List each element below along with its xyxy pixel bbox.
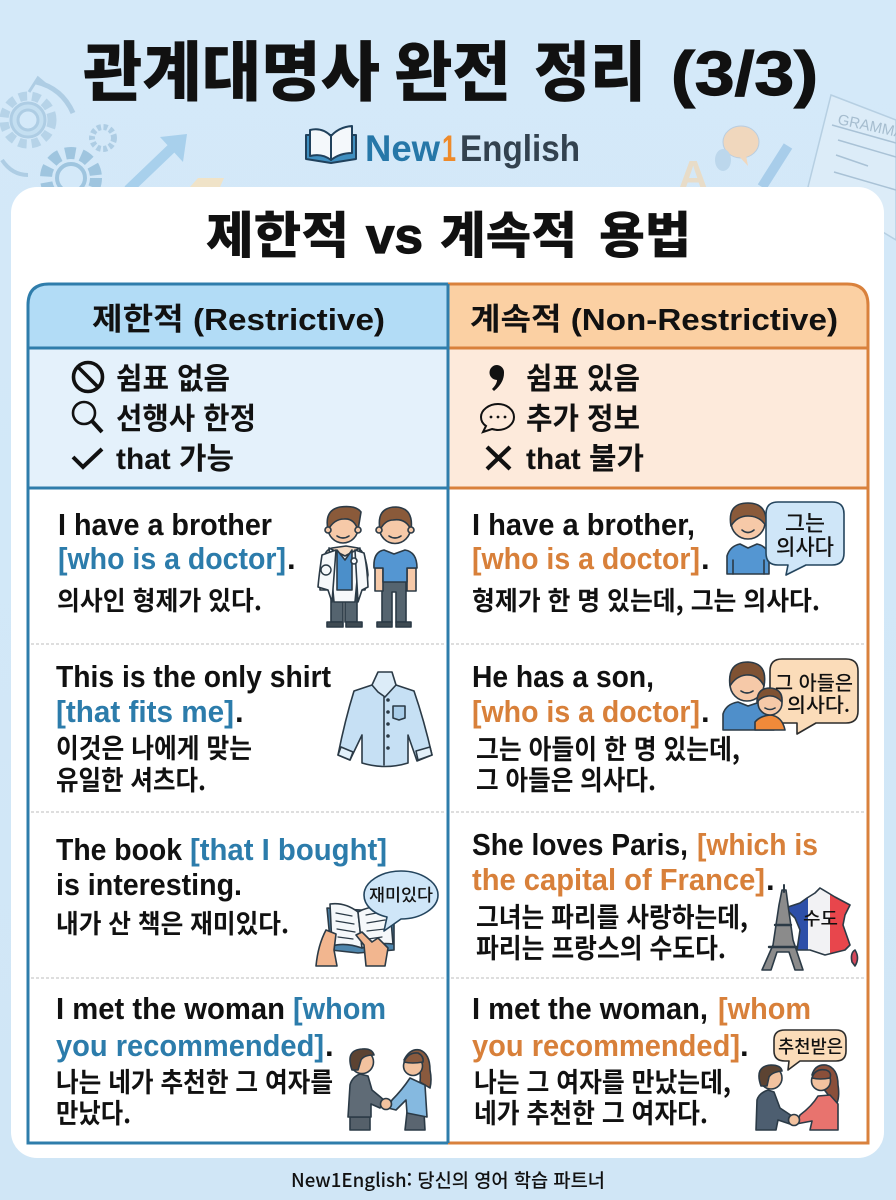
icon: magnifier	[73, 402, 102, 432]
non-restrictive example 4	[472, 991, 846, 1131]
restrictive example 4: 나는 네가 추천한 그 여자를	[56, 1061, 333, 1100]
non-restrictive example 4: 추천받은	[778, 1033, 843, 1059]
illustration: man with bubble	[727, 502, 844, 575]
restrictive example 3	[56, 832, 438, 966]
title: 관계대명사	[83, 20, 380, 114]
features: non-restrictive: that 불가	[526, 443, 644, 476]
restrictive example 1: 의사인 형제가 있다.	[57, 581, 262, 618]
features: non-restrictive	[448, 348, 868, 488]
illustration: handshake	[348, 1049, 431, 1130]
title: (3/3)	[671, 40, 818, 109]
table frame	[28, 284, 868, 1143]
restrictive example 4: I met the woman	[56, 991, 285, 1026]
non-restrictive example 4: 네가 추천한 그 여자다.	[474, 1092, 708, 1131]
restrictive example 4: 만났다.	[56, 1092, 131, 1131]
restrictive example 1: [who is a doctor]	[58, 541, 286, 576]
icon: open book	[306, 126, 356, 163]
restrictive example 4: you recommended]	[56, 1028, 324, 1063]
illustration: father and son with bubble	[723, 659, 858, 734]
non-restrictive example 1	[472, 502, 844, 618]
restrictive example 3: The book	[56, 832, 183, 867]
footer: New1English: 당신의 영어 학습 파트너	[291, 1166, 605, 1193]
restrictive example 2: This is the only shirt	[56, 659, 331, 694]
non-restrictive example 4: I met the woman,	[472, 991, 708, 1026]
non-restrictive example 1: I have a brother,	[472, 507, 695, 542]
non-restrictive example 4: you recommended]	[472, 1028, 740, 1063]
icon: no sign	[74, 362, 102, 392]
non-restrictive example 3: She loves Paris,	[472, 827, 688, 862]
features: non-restrictive: 쉼표 있음	[526, 363, 640, 396]
logo: New1English: New	[365, 128, 440, 169]
features: non-restrictive: 추가 정보	[526, 403, 640, 436]
icon: check	[73, 449, 102, 467]
restrictive example 1	[57, 507, 417, 627]
non-restrictive example 1: [who is a doctor]	[472, 541, 700, 576]
restrictive example 2: .	[235, 694, 244, 729]
non-restrictive example 2: .	[701, 694, 710, 729]
non-restrictive example 3: 파리는 프랑스의 수도다.	[476, 927, 726, 966]
restrictive example 4	[56, 991, 431, 1131]
bubble: 그 아들은 의사다	[770, 659, 858, 734]
non-restrictive example 2: 그는 아들이 한 명 있는데,	[476, 728, 740, 767]
non-restrictive example 1: 형제가 한 명 있는데, 그는 의사다.	[472, 581, 820, 618]
background decoration: grammar sheet, bubble, pencil, letter: A	[678, 152, 708, 199]
non-restrictive example 2: 그 아들은	[775, 667, 853, 696]
features: restrictive	[28, 348, 448, 488]
restrictive example 3: [that I bought]	[190, 832, 387, 867]
restrictive example 4: [whom	[293, 991, 386, 1026]
restrictive example 3: 내가 산 책은 재미있다.	[56, 904, 289, 941]
non-restrictive example 4: 나는 그 여자를 만났는데,	[474, 1061, 731, 1100]
restrictive example 4: .	[325, 1028, 334, 1063]
features: restrictive: 쉼표 없음	[116, 363, 230, 396]
non-restrictive example 3	[472, 827, 858, 970]
subtitle	[206, 196, 691, 268]
subtitle: 용법	[599, 196, 691, 268]
bubble: 추천받은	[774, 1030, 846, 1070]
non-restrictive example 2: 그 아들은 의사다.	[476, 759, 656, 798]
icon: comma	[490, 365, 504, 391]
non-restrictive example 3: 그녀는 파리를 사랑하는데,	[476, 896, 748, 935]
panel: restrictive column	[28, 284, 448, 488]
illustration: Eiffel tower and France map	[762, 885, 858, 970]
illustration: open book with hands	[316, 871, 438, 966]
background decoration: gears and arrow	[2, 78, 224, 203]
title	[83, 20, 818, 114]
restrictive example 2	[56, 659, 432, 798]
illustration: handshake with bubble	[756, 1030, 846, 1130]
bubble: 재미있다	[364, 871, 438, 931]
restrictive example 2: [that fits me]	[56, 694, 234, 729]
subtitle: vs	[366, 208, 423, 264]
header: non-restrictive	[448, 284, 868, 348]
bubble: 그는 의사다	[766, 502, 844, 575]
logo: New1English: English	[460, 128, 580, 169]
non-restrictive example 2: [who is a doctor]	[472, 694, 700, 729]
panel: non-restrictive column	[448, 284, 868, 488]
illustration: doctor and brother	[318, 507, 417, 627]
title: 정리	[534, 20, 646, 114]
subtitle: 제한적	[206, 196, 349, 268]
non-restrictive example 2: He has a son,	[472, 659, 654, 694]
logo: New1English: 1	[442, 128, 456, 169]
non-restrictive example 2: 의사다.	[787, 689, 850, 718]
logo: New1English	[306, 126, 580, 169]
non-restrictive example 1: 의사다	[776, 530, 834, 562]
restrictive example 2: 유일한 셔츠다.	[56, 759, 206, 798]
non-restrictive example 4: [whom	[718, 991, 811, 1026]
non-restrictive example 2	[472, 659, 858, 798]
non-restrictive example 3: the capital of France]	[472, 862, 765, 897]
header: restrictive	[28, 284, 448, 348]
illustration: shirt	[338, 672, 432, 766]
non-restrictive example 1: 그는	[785, 506, 825, 538]
non-restrictive example 4: .	[740, 1028, 749, 1063]
non-restrictive example 3: 수도	[803, 905, 838, 931]
title: 완전	[394, 20, 511, 114]
non-restrictive example 3: [which is	[697, 827, 818, 862]
header: non-restrictive: 계속적 (Non-Restrictive)	[470, 302, 838, 337]
restrictive example 1: I have a brother	[58, 507, 272, 542]
icon: chat bubble	[481, 404, 514, 432]
features: restrictive: 선행사 한정	[116, 403, 256, 436]
panel: main white card	[11, 187, 884, 1158]
header: restrictive: 제한적 (Restrictive)	[92, 302, 385, 337]
features: restrictive: that 가능	[116, 443, 234, 476]
restrictive example 3: 재미있다	[369, 881, 433, 906]
icon: cross	[487, 447, 510, 469]
non-restrictive example 1: .	[701, 541, 710, 576]
subtitle: 계속적	[440, 196, 577, 268]
non-restrictive example 3: .	[766, 862, 775, 897]
restrictive example 1: .	[287, 541, 296, 576]
background decoration: grammar sheet, bubble, pencil, letter	[678, 95, 896, 240]
restrictive example 3: is interesting.	[56, 867, 242, 902]
restrictive example 2: 이것은 나에게 맞는	[56, 727, 252, 766]
